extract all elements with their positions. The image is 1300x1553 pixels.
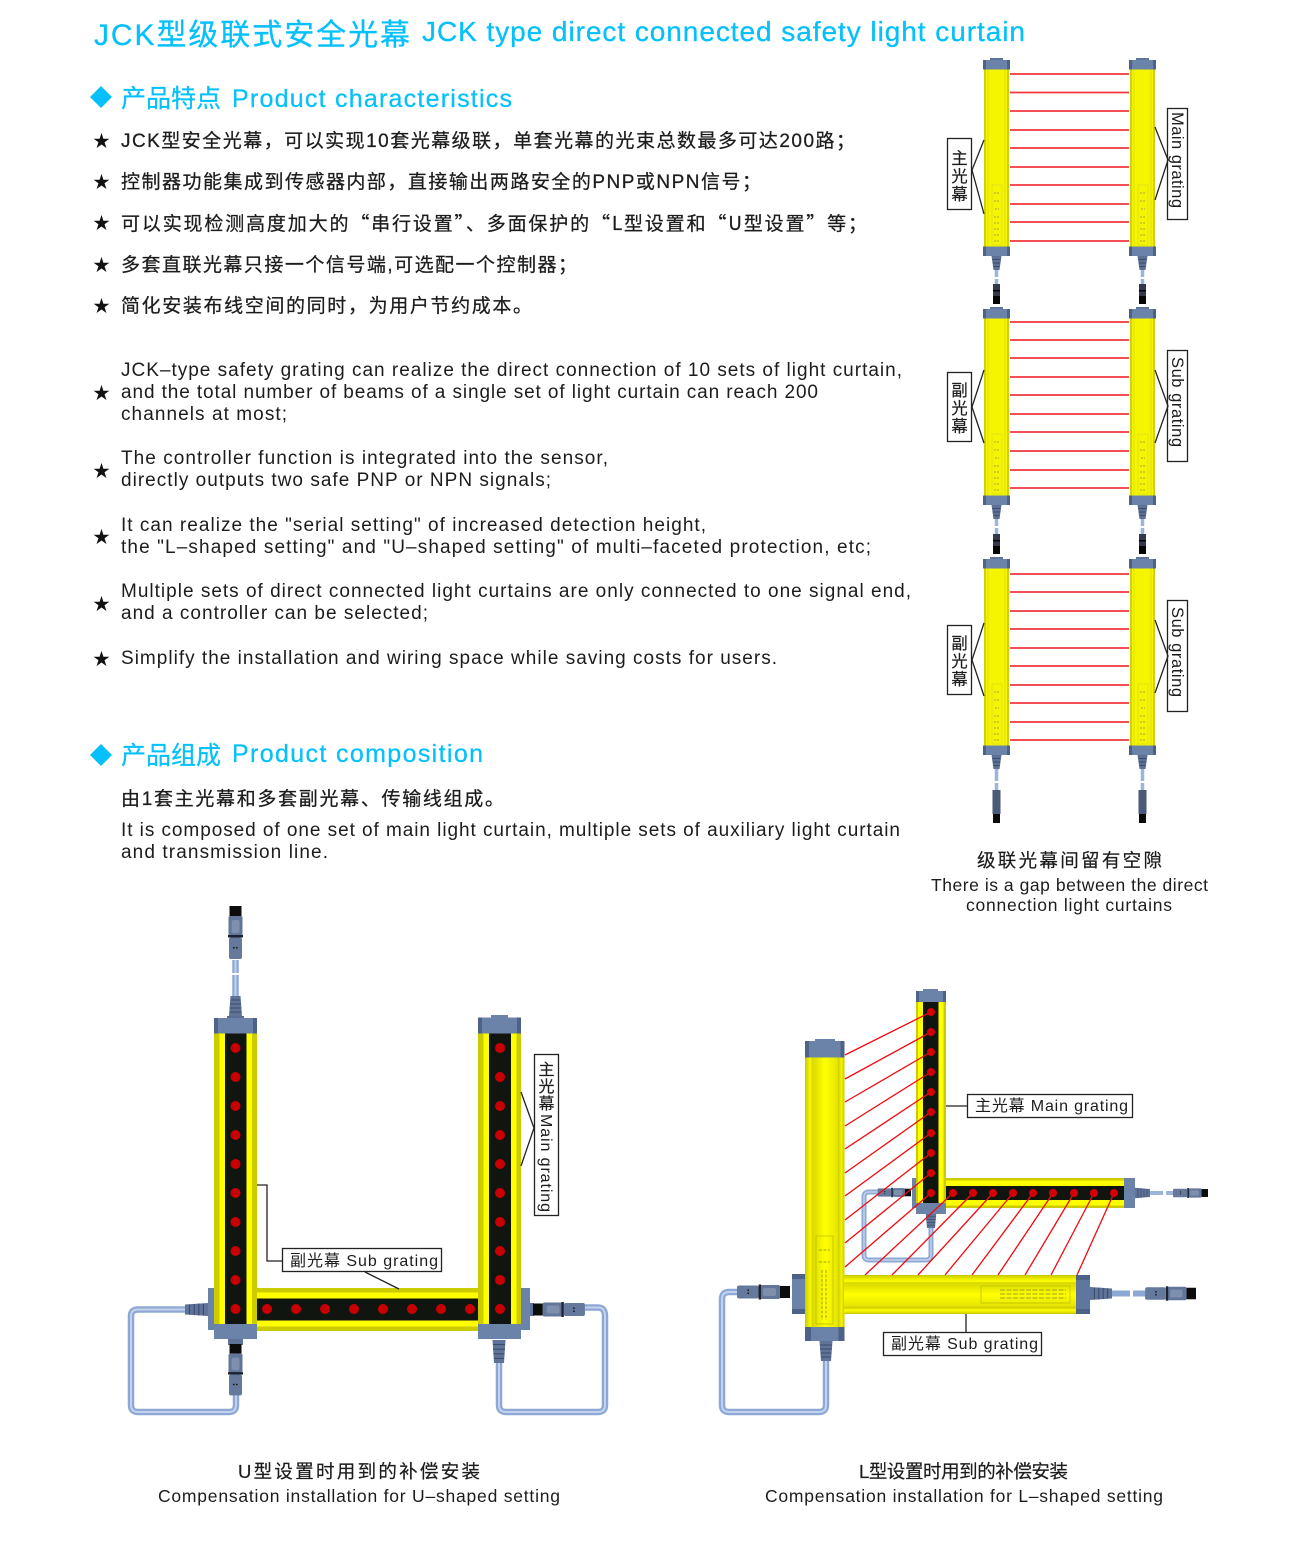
connectors	[737, 1188, 1208, 1361]
title: JCK型级联式安全光幕	[94, 19, 410, 52]
English feature list: It can realize the "serial setting" of increased detection height,	[121, 515, 706, 536]
heading: product composition: Product composition	[232, 740, 483, 768]
label: sub light curtain, set 2 left: 幕	[951, 417, 968, 436]
English feature list: ★	[93, 384, 110, 403]
main grating, horizontal	[946, 1178, 1135, 1208]
English feature list: and the total number of beams of a single set of light curtain can reach 200	[121, 382, 818, 403]
caption: U-shaped setting: U型设置时用到的补偿安装	[238, 1461, 480, 1482]
Chinese feature list: ★	[93, 214, 110, 233]
diagram: cascaded light curtains	[948, 58, 1188, 823]
Chinese feature list: 简化安装布线空间的同时，为用户节约成本。	[121, 295, 532, 317]
diagram: L-shaped setting	[722, 989, 1208, 1412]
heading: product characteristics: Product characteristics	[232, 85, 512, 113]
Chinese feature list: ★	[93, 256, 110, 275]
Chinese feature list: ★	[93, 173, 110, 192]
label: main light curtain, left: 主	[951, 149, 968, 168]
main grating, vertical	[912, 989, 946, 1214]
caption: L-shaped setting	[765, 1461, 1163, 1506]
label: sub light curtain, set 2 left: 副	[951, 381, 968, 400]
label: sub grating, set 3 right	[1155, 600, 1188, 712]
Chinese feature list: ★	[93, 132, 110, 151]
English feature list: channels at most;	[121, 404, 287, 425]
label: sub light curtain, set 3 left	[948, 623, 984, 696]
caption: U-shaped setting: Compensation installation for U–shaped setting	[158, 1486, 560, 1506]
set 1: main light curtain	[983, 58, 1156, 304]
composition description: and transmission line.	[121, 842, 328, 863]
Chinese feature list: 多套直联光幕只接一个信号端,可选配一个控制器；	[121, 254, 577, 276]
Chinese feature list: 控制器功能集成到传感器内部，直接输出两路安全的PNP或NPN信号；	[121, 171, 761, 193]
heading: product characteristics	[90, 85, 512, 113]
label: main grating: 主	[538, 1061, 555, 1079]
heading: product composition	[90, 740, 483, 770]
composition description	[121, 788, 900, 863]
label: sub light curtain, set 2 left: 光	[951, 399, 968, 418]
label: sub light curtain, set 2 left	[948, 370, 984, 443]
label: main grating: 主光幕 Main grating	[975, 1097, 1128, 1115]
English feature list: ★	[93, 462, 110, 481]
composition description: 由1套主光幕和多套副光幕、传输线组成。	[121, 788, 504, 810]
caption: gap between curtains: connection light curtains	[966, 895, 1172, 915]
label: sub light curtain, set 3 left: 光	[951, 652, 968, 671]
English feature list: ★	[93, 650, 110, 669]
label: main grating: Main grating	[537, 1114, 554, 1212]
label: sub light curtain, set 3 left: 幕	[951, 670, 968, 689]
caption: U-shaped setting	[158, 1461, 560, 1506]
label: sub grating	[257, 1185, 442, 1289]
English feature list: Simplify the installation and wiring space while saving costs for users.	[121, 648, 777, 669]
label: main grating, right	[1155, 108, 1188, 220]
label: main light curtain, left	[948, 138, 984, 214]
set 2: sub light curtain	[983, 307, 1156, 554]
title	[94, 16, 1025, 52]
Chinese feature list	[93, 130, 867, 317]
caption: gap between curtains: There is a gap between the direct	[931, 875, 1208, 895]
English feature list: ★	[93, 528, 110, 547]
English feature list: JCK–type safety grating can realize the direct connection of 10 sets of light curtain,	[121, 360, 902, 381]
label: main grating: 幕	[538, 1095, 555, 1113]
label: sub grating	[884, 1314, 1042, 1356]
label: sub light curtain, set 3 left: 副	[951, 634, 968, 653]
light beams	[845, 1012, 1114, 1275]
emitter dots	[927, 1008, 1118, 1197]
label: sub grating, set 2 right: Sub grating	[1168, 357, 1186, 447]
connectors	[185, 906, 585, 1395]
label: main grating	[521, 1054, 558, 1216]
sub grating, vertical	[792, 1039, 844, 1341]
Chinese feature list: ★	[93, 297, 110, 316]
caption: gap between curtains: 级联光幕间留有空隙	[977, 850, 1162, 871]
English feature list: the "L–shaped setting" and "U–shaped setting" of multi–faceted protection, etc;	[121, 537, 871, 558]
left vertical grating	[208, 1016, 257, 1339]
cables	[131, 960, 605, 1412]
composition description: It is composed of one set of main light curtain, multiple sets of auxiliary light curtain	[121, 820, 900, 841]
English feature list	[93, 360, 911, 669]
set 3: sub light curtain	[983, 557, 1156, 823]
English feature list: Multiple sets of direct connected light curtains are only connected to one signal end,	[121, 581, 911, 602]
diagram: U-shaped setting	[131, 906, 605, 1412]
Chinese feature list: JCK型安全光幕，可以实现10套光幕级联，单套光幕的光束总数最多可达200路；	[121, 130, 855, 152]
English feature list: ★	[93, 595, 110, 614]
label: sub grating: 副光幕 Sub grating	[290, 1252, 438, 1270]
title: JCK type direct connected safety light curtain	[422, 16, 1025, 47]
English feature list: The controller function is integrated into the sensor,	[121, 448, 608, 469]
caption: L-shaped setting: Compensation installation for L–shaped setting	[765, 1486, 1163, 1506]
English feature list: and a controller can be selected;	[121, 603, 428, 624]
cables	[722, 1192, 1174, 1412]
horizontal sub grating	[257, 1288, 478, 1331]
heading: product composition: 产品组成	[121, 742, 221, 770]
label: sub grating: 副光幕 Sub grating	[891, 1335, 1038, 1353]
sub grating, horizontal	[844, 1275, 1090, 1314]
label: main light curtain, left: 幕	[951, 185, 968, 204]
English feature list: directly outputs two safe PNP or NPN signals;	[121, 470, 551, 491]
Chinese feature list: 可以实现检测高度加大的“串行设置”、多面保护的“L型设置和“U型设置”等；	[121, 209, 867, 236]
caption: L-shaped setting: L型设置时用到的补偿安装	[859, 1461, 1068, 1482]
label: main grating, right: Main grating	[1168, 112, 1186, 208]
label: sub grating, set 3 right: Sub grating	[1168, 607, 1186, 697]
caption: gap between curtains	[931, 850, 1208, 915]
label: sub grating, set 2 right	[1155, 350, 1188, 462]
label: main grating	[946, 1094, 1132, 1118]
label: main light curtain, left: 光	[951, 167, 968, 186]
right vertical grating	[478, 1015, 530, 1339]
heading: product characteristics: 产品特点	[121, 85, 221, 113]
label: main grating: 光	[538, 1078, 555, 1096]
